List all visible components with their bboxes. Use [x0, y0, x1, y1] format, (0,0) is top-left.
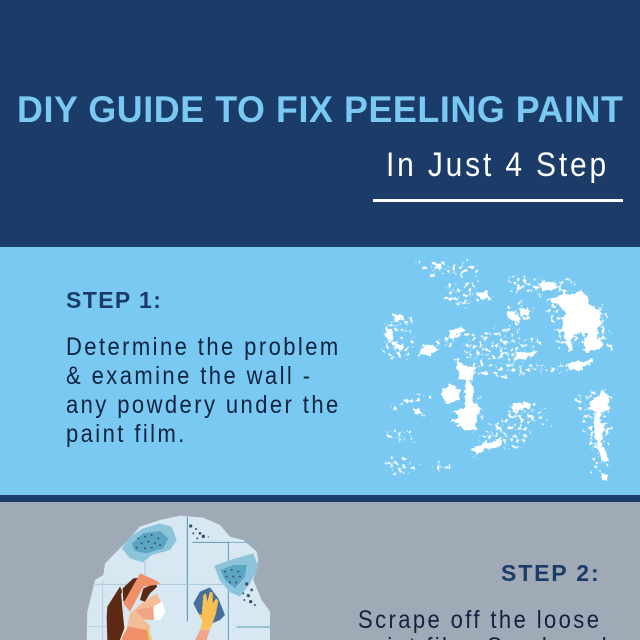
subtitle underline: [373, 199, 623, 202]
mask: [153, 602, 166, 620]
step 1 text: & examine the wall -: [66, 362, 312, 390]
icon: mould spores: [189, 524, 256, 606]
headband: [123, 573, 160, 612]
icon: cleaning cloth and glove: [193, 587, 225, 640]
illustration: peeling paint texture: [381, 259, 613, 481]
step 2 text: Scrape off the loose: [358, 606, 601, 634]
title: DIY GUIDE TO FIX PEELING PAINT: [17, 89, 623, 130]
illustration: woman cleaning mould off a tiled wall: [86, 516, 270, 640]
icon: mould patch right: [214, 553, 258, 597]
neck and jaw: [120, 593, 162, 640]
speckled clusters: [383, 260, 610, 475]
shirt: [121, 627, 151, 640]
step 1 text: Determine the problem: [66, 333, 341, 361]
panel: step 1: [0, 247, 640, 495]
step 1 text: paint film.: [66, 420, 187, 448]
wall: [87, 516, 270, 640]
panel: step 2: [0, 495, 640, 640]
subtitle: In Just 4 Step: [386, 146, 609, 184]
step 2 heading: STEP 2:: [501, 560, 600, 586]
tile lines: [87, 517, 270, 640]
panel: header: [0, 0, 640, 247]
woman cleaning: [107, 573, 166, 640]
step 1 text: any powdery under the: [66, 391, 341, 419]
icon: mould patch left: [122, 523, 177, 562]
hair: [123, 577, 142, 602]
ponytail: [107, 587, 125, 640]
step 1 text: [66, 333, 341, 448]
step 1 heading: STEP 1:: [66, 287, 162, 313]
